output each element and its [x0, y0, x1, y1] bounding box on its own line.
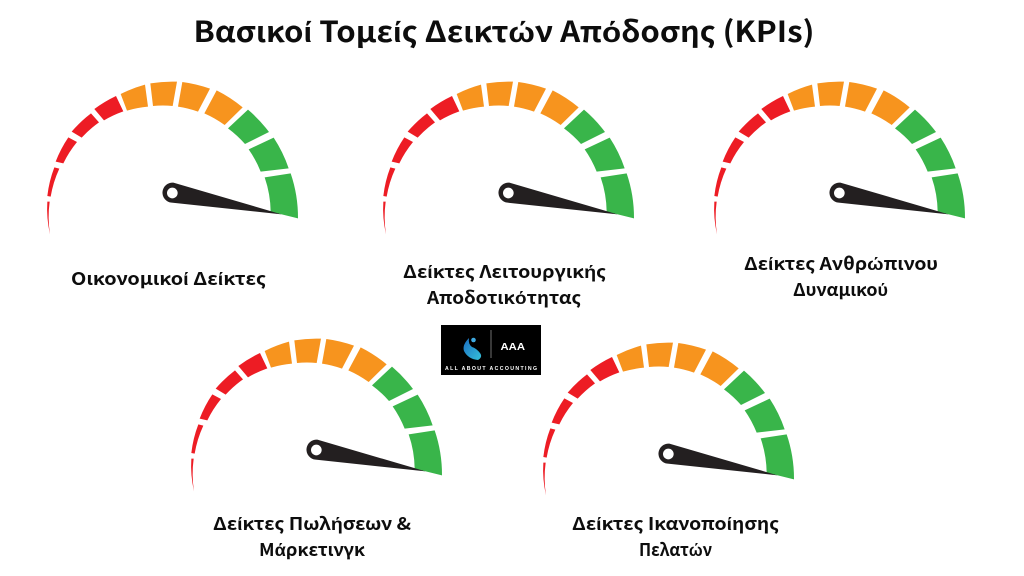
label: sales and marketing: [213, 511, 411, 562]
gauge: operational efficiency: [383, 82, 634, 234]
gauge: financial indicators: [47, 82, 298, 234]
title: Βασικο ί Τομείς Δεικτ ών Απόδοσης (KPIs): [194, 9, 814, 51]
label: operational efficiency: Δείκτες Λειτουργικ ής: [403, 259, 606, 284]
gauge: sales and marketing: [191, 339, 442, 491]
label: human resources: Δυναμικού: [793, 277, 888, 302]
label: customer satisfaction: [572, 511, 779, 562]
gauge: customer satisfaction: [543, 343, 794, 495]
label: operational efficiency: Αποδοτικ ότητας: [426, 285, 581, 310]
label: operational efficiency: [403, 259, 606, 310]
label: financial indicators: Οικονομικο ί Δείκτες: [71, 266, 266, 291]
icon: logo swirl: [464, 338, 481, 360]
logo: All About Accounting: ALL ABOUT ACCOUNTING: [445, 366, 537, 372]
label: human resources: Δείκτες Ανθρ ώπινου: [744, 251, 938, 276]
label: customer satisfaction: Πελατών: [639, 537, 712, 562]
logo: All About Accounting: [441, 325, 541, 375]
label: sales and marketing: Δείκτες Πωλ ήσεων &: [213, 511, 411, 536]
gauge: human resources: [714, 82, 965, 234]
label: sales and marketing: Μάρκετινγκ: [259, 537, 365, 562]
label: customer satisfaction: Δείκτες Ικανοπο ίησης: [572, 511, 779, 536]
label: human resources: [744, 251, 938, 302]
logo: All About Accounting: AAA: [500, 342, 525, 353]
